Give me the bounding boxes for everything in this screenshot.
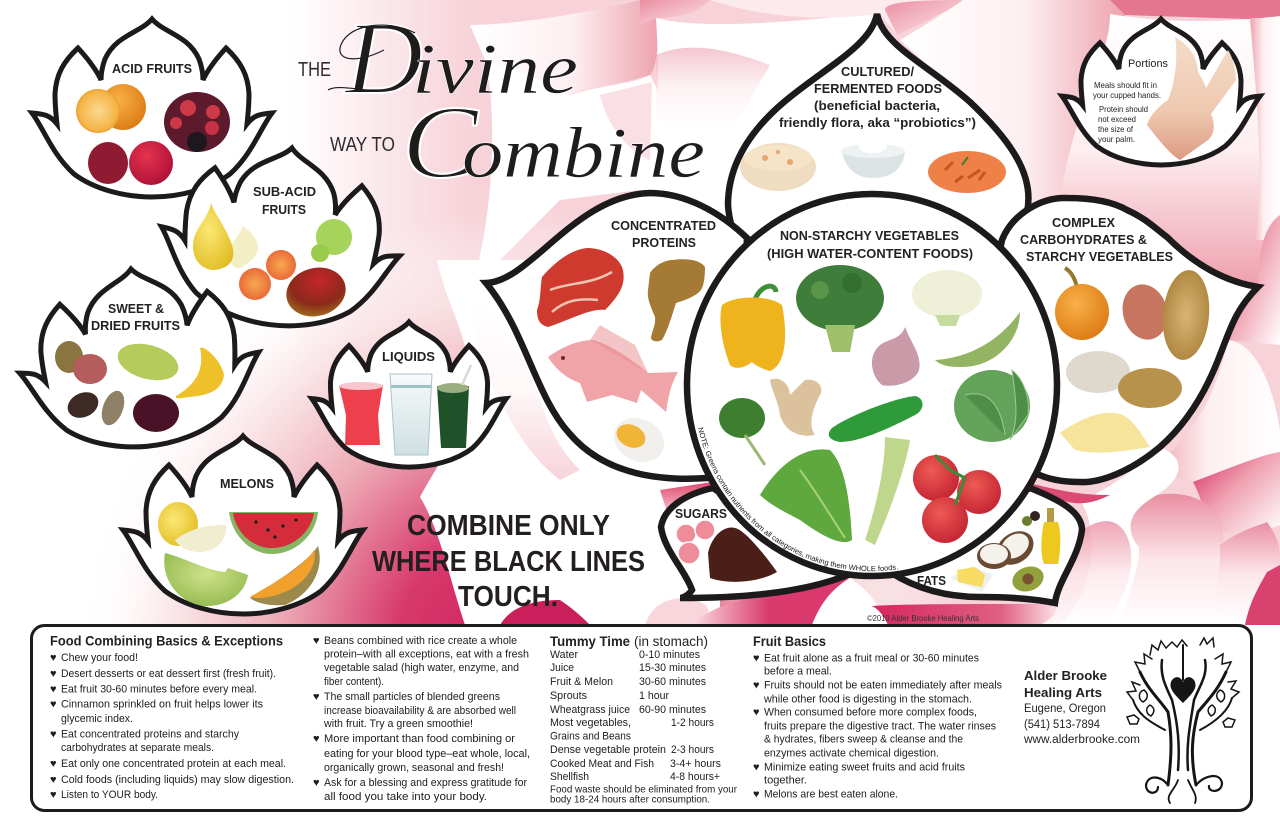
icon: olive oil [1041, 508, 1060, 564]
contact: alder brooke healing arts: Alder Brooke [1024, 668, 1107, 683]
column: beans and greens notes: ♥ [313, 733, 320, 745]
table: digestion times: 15-30 minutes [639, 662, 706, 674]
text: portion guidance: your cupped hands. [1093, 91, 1161, 100]
text: portion guidance: not exceed [1098, 115, 1136, 124]
heading: sub-acid fruits: SUB-ACID [253, 185, 316, 199]
icon: green smoothie [437, 365, 471, 448]
heading: cultured [779, 64, 976, 130]
table: digestion times: 0-10 minutes [639, 649, 700, 661]
callout: combine only where black lines touch: TOUCH. [458, 581, 558, 613]
heading: non-starchy vegetables [767, 229, 973, 261]
icon: russet potato [1159, 268, 1213, 362]
heading: portions: Portions [1128, 58, 1168, 70]
list: basics: ♥ [50, 698, 57, 710]
icon: pomegranate [129, 141, 173, 185]
list: basics: ♥ [50, 789, 57, 801]
heading: complex carbohydrates: COMPLEX [1052, 216, 1116, 230]
icon: kimchi [928, 151, 1006, 193]
icon: green grapes [114, 338, 182, 386]
table: digestion times: 60-90 minutes [639, 704, 706, 716]
heading: cultured: (beneficial bacteria, [814, 98, 940, 113]
column: beans and greens notes: Beans combined with rice create a whole [324, 635, 517, 647]
icon: berries [164, 92, 230, 152]
callout: combine only where black lines touch: WHERE BLACK LINES [372, 546, 645, 578]
list: basics: Listen to YOUR body. [61, 789, 158, 801]
icon: bananas [176, 348, 224, 398]
column: beans and greens notes: vegetable salad (high water, enzyme, and [324, 662, 519, 674]
icon: sauerkraut bowl [740, 143, 816, 191]
title: Divine: D [343, 1, 423, 116]
icon: avocado [1009, 562, 1047, 596]
label: sugars: SUGARS [675, 507, 727, 521]
icon: steak [537, 248, 624, 327]
list: basics: Cold foods (including liquids) may slow digestion. [61, 774, 294, 786]
flourish: D swash [328, 25, 415, 91]
heading: non-starchy vegetables: NON-STARCHY VEGETABLES [780, 229, 959, 243]
list: basics: Eat fruit 30-60 minutes before every meal. [61, 684, 257, 696]
icon: red juice glass [339, 382, 383, 445]
heading: cultured: friendly flora, aka “probiotics”) [779, 115, 976, 130]
list: fruit basics: Fruits should not be eaten immediately after meals [764, 680, 1002, 692]
icon: water glass [390, 374, 432, 455]
heading: tummy time: Tummy Time [550, 634, 630, 649]
icon: celery stalk [865, 437, 910, 545]
column: beans and greens notes: fiber content). [324, 676, 384, 688]
note: food waste: body 18-24 hours after consumption. [550, 794, 710, 806]
contact: alder brooke healing arts: (541) 513-7894 [1024, 719, 1101, 731]
column: beans and greens notes: protein–with all exceptions, eat with a fresh [324, 648, 529, 660]
heading: sweet and dried fruits [91, 302, 180, 333]
icon: ginger [770, 379, 821, 436]
icon: chicken leg [648, 259, 705, 341]
contact: alder brooke healing arts: Healing Arts [1024, 685, 1102, 700]
callout: combine only where black lines touch: COMBINE ONLY [407, 510, 610, 542]
icon: cupped hands [1147, 37, 1236, 160]
panel: sweet and dried fruits [11, 259, 266, 457]
callout: combine only where black lines touch [372, 510, 645, 613]
column: fruit basics [753, 634, 1002, 800]
title: Combine: ombine [462, 113, 705, 193]
list: fruit basics: Melons are best eaten alone. [764, 788, 898, 800]
column: beans and greens notes: More important than food combining or [324, 733, 515, 745]
table: digestion times: Fruit & Melon [550, 676, 613, 688]
icon: green apple [311, 219, 352, 262]
table: digestion times: 1-2 hours [671, 717, 714, 729]
table: digestion times: Juice [550, 662, 574, 674]
column: beans and greens notes: ♥ [313, 691, 320, 703]
title: Divine: ivine [412, 29, 578, 109]
list: fruit basics: ♥ [753, 706, 760, 718]
icon: noodles [1060, 413, 1150, 453]
list: basics: Cinnamon sprinkled on fruit helps lower its [61, 698, 263, 710]
column: beans and greens notes: ♥ [313, 777, 320, 789]
heading: sweet and dried fruits: SWEET & [108, 302, 164, 316]
list: basics: Eat only one concentrated protein at each meal. [61, 758, 286, 770]
icon: pomegranate half [88, 142, 128, 184]
icon: pumpkin [1055, 268, 1109, 340]
list: fruit basics: When consumed before more complex foods, [764, 706, 977, 718]
heading: food combining basics: Food Combining Basics & Exceptions [50, 634, 283, 648]
column: beans and greens notes: The small particles of blended greens [324, 691, 500, 703]
heading: tummy time: (in stomach) [634, 634, 708, 649]
column: beans and greens notes: ♥ [313, 635, 320, 647]
column: beans and greens notes: organically grown, seasonal and fresh! [324, 762, 504, 774]
icon: chocolate cake [708, 527, 777, 582]
icon: red onion [872, 327, 920, 386]
icon: raisins [133, 394, 179, 432]
icon: pea pod [935, 312, 1020, 367]
icon: tree logo with heart [1127, 638, 1239, 803]
heading: non-starchy vegetables: (HIGH WATER-CONTENT FOODS) [767, 247, 973, 261]
icon: broccoli [796, 265, 884, 352]
heading: complex carbohydrates: CARBOHYDRATES & [1020, 233, 1147, 247]
text: portion guidance: Meals should fit in [1094, 81, 1157, 90]
column: beans and greens notes: all food you take into your body. [324, 791, 487, 803]
panel: fats [890, 488, 1082, 603]
title: Combine: C [402, 85, 480, 200]
table: digestion times: Water [550, 649, 578, 661]
list: fruit basics: Minimize eating sweet fruits and acid fruits [764, 762, 965, 774]
table: digestion times: Wheatgrass juice [550, 704, 630, 716]
list: fruit basics: & hydrates, fibers sweep & cleanse and the [764, 734, 963, 746]
column: beans and greens notes: Ask for a blessing and express gratitude for [324, 777, 527, 789]
icon: red potato [1117, 279, 1173, 345]
table: digestion times: 4-8 hours+ [670, 771, 720, 783]
panel: liquids [312, 322, 506, 467]
icon: cauliflower [912, 270, 982, 326]
note: curved text: NOTE: Greens contain nutrients from all categories, making them WHOLE foods. [698, 427, 898, 572]
text: portion guidance: your palm. [1098, 135, 1135, 144]
list: basics: Eat concentrated proteins and starchy [61, 728, 239, 740]
column: beans and greens notes [313, 635, 530, 803]
heading: complex carbohydrates [1020, 216, 1173, 264]
list: basics: ♥ [50, 728, 57, 740]
icon: yellow bell pepper [720, 286, 785, 371]
table: digestion times: 3-4+ hours [670, 758, 721, 770]
heading: cultured: FERMENTED FOODS [814, 81, 942, 96]
heading: concentrated proteins [611, 219, 716, 250]
panel: information strip [32, 626, 1252, 810]
panel: acid fruits [32, 19, 272, 197]
note: food waste [550, 784, 738, 806]
list: basics: carbohydrates at separate meals. [61, 742, 214, 754]
icon: yogurt bowl [841, 141, 905, 178]
table: digestion times [550, 649, 721, 783]
contact: alder brooke healing arts: www.alderbrooke.com [1023, 734, 1140, 746]
panel: sugars [661, 488, 850, 598]
list: basics: ♥ [50, 758, 57, 770]
heading: liquids: LIQUIDS [382, 350, 435, 364]
heading: cultured: CULTURED/ [841, 64, 914, 79]
list: basics: ♥ [50, 684, 57, 696]
icon: dates [63, 387, 129, 428]
panel: concentrated proteins [486, 193, 747, 479]
column: tummy time [550, 634, 738, 806]
icon: cantaloupe [250, 546, 320, 605]
table: digestion times: 1 hour [639, 690, 669, 702]
panel: portions [1062, 19, 1260, 165]
heading: concentrated proteins: CONCENTRATED [611, 219, 716, 233]
icon: watermelon [229, 512, 318, 554]
table: digestion times: Shellfish [550, 771, 589, 783]
table: digestion times: Cooked Meat and Fish [550, 758, 654, 770]
icon: ground grain [1118, 368, 1182, 408]
icon: pears [193, 203, 258, 270]
list: fruit basics: before a meal. [764, 666, 832, 678]
icon: honeydew [164, 553, 248, 606]
list: fruit basics: while other food is digesting in the stomach. [763, 694, 972, 706]
contact: alder brooke healing arts [1023, 668, 1140, 746]
column: beans and greens notes: increase bioavailability & are absorbed well [324, 705, 516, 717]
note: food waste: Food waste should be eliminated from your [550, 784, 738, 796]
icon: yellow melon [158, 502, 226, 552]
heading: melons: MELONS [220, 477, 274, 491]
icon: romaine lettuce [760, 449, 852, 542]
table: digestion times: Most vegetables, [550, 717, 631, 729]
heading: concentrated proteins: PROTEINS [632, 236, 696, 250]
list: basics: ♥ [50, 668, 57, 680]
panel: sub-acid fruits [151, 133, 411, 339]
list: basics: ♥ [50, 652, 57, 664]
table: digestion times: Grains and Beans [550, 730, 631, 742]
list: fruit basics: fruits prepare the digestive tract. The water rinses [764, 720, 996, 732]
panel: cultured fermented foods [728, 14, 1028, 280]
heading: fruit basics: Fruit Basics [753, 634, 826, 649]
list: basics: Chew your food! [61, 652, 138, 664]
heading: complex carbohydrates: STARCHY VEGETABLES [1026, 250, 1173, 264]
icon: coconut [977, 524, 1040, 572]
icon: peach [239, 268, 271, 300]
contact: alder brooke healing arts: Eugene, Oregon [1024, 703, 1106, 715]
icon: parsley [719, 398, 765, 465]
heading: sweet and dried fruits: DRIED FRUITS [91, 319, 180, 333]
icon: peppermint candies [676, 520, 715, 564]
icon: figs [55, 341, 107, 384]
list: fruit basics: together. [764, 774, 807, 786]
panel: melons [123, 436, 363, 614]
heading: sub-acid fruits [253, 185, 316, 217]
copyright: ©2010 Alder Brooke Healing Arts [867, 614, 979, 623]
table: digestion times: 2-3 hours [671, 744, 714, 756]
list: fruit basics: ♥ [753, 762, 760, 774]
title: way to: WAY TO [330, 134, 395, 156]
list: fruit basics: ♥ [753, 788, 760, 800]
label: fats: FATS [917, 574, 946, 588]
icon: olives [1022, 511, 1040, 526]
table: digestion times: 30-60 minutes [639, 676, 706, 688]
column: beans and greens notes: with fruit. Try a green smoothie! [323, 718, 473, 730]
list: basics: Desert desserts or eat dessert first (fresh fruit). [61, 668, 276, 680]
list: fruit basics [753, 652, 1002, 800]
icon: rice [1066, 351, 1130, 393]
icon: mango [281, 261, 351, 323]
text: portion guidance [1093, 81, 1161, 144]
list: basics [50, 652, 294, 801]
panel: non-starchy vegetables [684, 190, 1060, 580]
icon: oranges [76, 84, 146, 133]
text: portion guidance: the size of [1098, 125, 1134, 134]
table: digestion times: Dense vegetable protein [550, 744, 666, 756]
heading: sub-acid fruits: FRUITS [262, 203, 306, 217]
list: basics: ♥ [50, 774, 57, 786]
list: fruit basics: enzymes activate chemical digestion. [764, 748, 939, 760]
table: digestion times: Sprouts [550, 690, 587, 702]
list: fruit basics: Eat fruit alone as a fruit meal or 30-60 minutes [764, 652, 979, 664]
text: portion guidance: Protein should [1099, 105, 1148, 114]
icon: butter [950, 566, 993, 592]
title: the: THE [298, 59, 331, 81]
icon: boiled egg [607, 410, 671, 470]
list: fruit basics: ♥ [753, 680, 760, 692]
icon: red fish [548, 325, 678, 412]
panel: complex carbohydrates and starchy vegetables [980, 198, 1258, 482]
heading: acid fruits: ACID FRUITS [112, 62, 192, 76]
column: beans and greens notes: eating for your blood type–eat whole, local, [324, 748, 530, 760]
icon: tomatoes [913, 455, 1001, 543]
list: basics: glycemic index. [61, 713, 133, 725]
column: food combining basics [50, 634, 294, 801]
list: fruit basics: ♥ [753, 652, 760, 664]
icon: apricot [266, 250, 296, 280]
icon: green cabbage [954, 370, 1030, 442]
icon: cucumber [829, 396, 922, 442]
title [298, 1, 705, 200]
